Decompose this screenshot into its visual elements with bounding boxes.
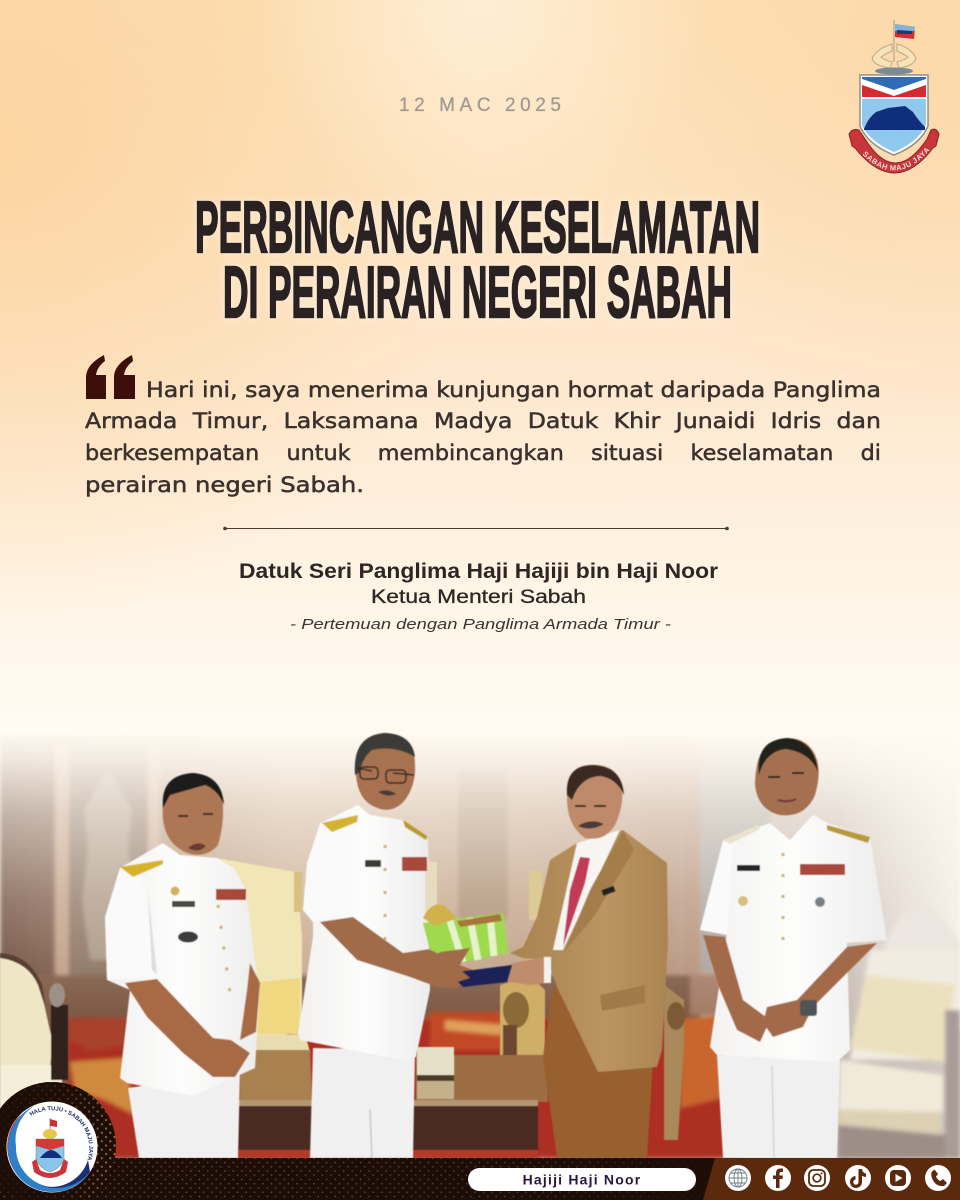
badge: Hala Tuju: HALA TUJU • SABAH MAJU JAYA bbox=[29, 1106, 94, 1160]
icon: scroll bbox=[848, 128, 940, 174]
forearm and hands bbox=[320, 917, 473, 988]
badge: Hala Tuju bbox=[0, 1082, 116, 1200]
carpet bbox=[68, 1012, 738, 1158]
photo fade over room bbox=[0, 730, 960, 1010]
icon: tiktok bbox=[845, 1165, 871, 1191]
jacket bbox=[105, 843, 260, 1096]
quote text bbox=[85, 378, 881, 497]
name pill bbox=[468, 1168, 696, 1191]
furniture: chair centre bbox=[428, 862, 685, 1140]
lapel bbox=[564, 830, 634, 952]
person: officer far right bbox=[700, 738, 887, 1158]
person: Chief Minister in tan suit bbox=[497, 765, 668, 1158]
head bbox=[163, 773, 223, 855]
arm left and hands bbox=[125, 979, 250, 1077]
trousers bbox=[310, 1048, 415, 1158]
epaulettes bbox=[723, 825, 760, 844]
quote text: Armada Timur, Laksamana Madya Datuk Khir Junaidi Idris dan bbox=[85, 409, 881, 433]
epaulette bbox=[120, 860, 163, 877]
epaulettes bbox=[322, 815, 358, 832]
insignia bbox=[737, 853, 845, 953]
shirt bbox=[553, 830, 620, 950]
icon: video bbox=[885, 1165, 911, 1191]
quote text: Hari ini, saya menerima kunjungan hormat daripada Panglima bbox=[146, 378, 881, 402]
trousers bbox=[543, 985, 653, 1158]
name pill: Hajiji Haji Noor bbox=[523, 1172, 641, 1188]
crest: state emblem, top right bbox=[848, 20, 940, 174]
arms bbox=[703, 935, 770, 1042]
photo: four men in a reception room bbox=[0, 730, 960, 1160]
icon: small crest bbox=[32, 1118, 68, 1178]
icon: shield bbox=[860, 75, 928, 155]
hands bbox=[497, 957, 547, 985]
trousers bbox=[717, 1055, 840, 1158]
furniture: right sofa bbox=[838, 905, 960, 1158]
gift box bbox=[423, 904, 512, 987]
icon: scroll: SABAH MAJU JAYA bbox=[863, 148, 930, 170]
furniture: chair behind left officer bbox=[217, 858, 310, 1056]
quote text: perairan negeri Sabah. bbox=[85, 473, 364, 497]
footer bar bbox=[0, 1158, 960, 1200]
room walls bbox=[0, 735, 960, 1160]
attribution: Ketua Menteri Sabah bbox=[371, 587, 586, 608]
icon: flag bbox=[893, 20, 915, 62]
jacket bbox=[700, 815, 887, 1062]
quote text: berkesempatan untuk membincangkan situasi keselamatan di bbox=[85, 441, 881, 465]
jacket bbox=[298, 805, 430, 1061]
head bbox=[567, 765, 622, 839]
tie bbox=[563, 857, 590, 947]
head bbox=[356, 733, 415, 810]
social icons bbox=[725, 1165, 951, 1191]
arm right bbox=[240, 963, 260, 1040]
furniture: coffee table bbox=[238, 1047, 548, 1158]
person: officer centre left bbox=[298, 733, 473, 1158]
icon: quotation marks bbox=[86, 355, 135, 399]
icon: arms bbox=[872, 44, 916, 68]
icon: globe bbox=[725, 1165, 751, 1191]
head bbox=[755, 738, 819, 815]
attribution: - Pertemuan dengan Panglima Armada Timur - bbox=[290, 616, 671, 633]
insignia bbox=[170, 886, 246, 1000]
insignia bbox=[365, 845, 427, 940]
icon: instagram bbox=[804, 1165, 830, 1191]
attribution bbox=[239, 560, 718, 633]
trousers bbox=[128, 1072, 240, 1158]
icon: facebook bbox=[765, 1165, 791, 1191]
person: officer far left bbox=[105, 773, 260, 1158]
jacket bbox=[510, 830, 668, 1072]
attribution: Datuk Seri Panglima Haji Hajiji bin Haji Noor bbox=[239, 560, 718, 583]
title bbox=[195, 188, 760, 333]
date: 12 MAC 2025 bbox=[399, 95, 561, 116]
icon: phone bbox=[925, 1165, 951, 1191]
furniture: left sofa bbox=[0, 953, 68, 1112]
divider bbox=[223, 527, 729, 530]
